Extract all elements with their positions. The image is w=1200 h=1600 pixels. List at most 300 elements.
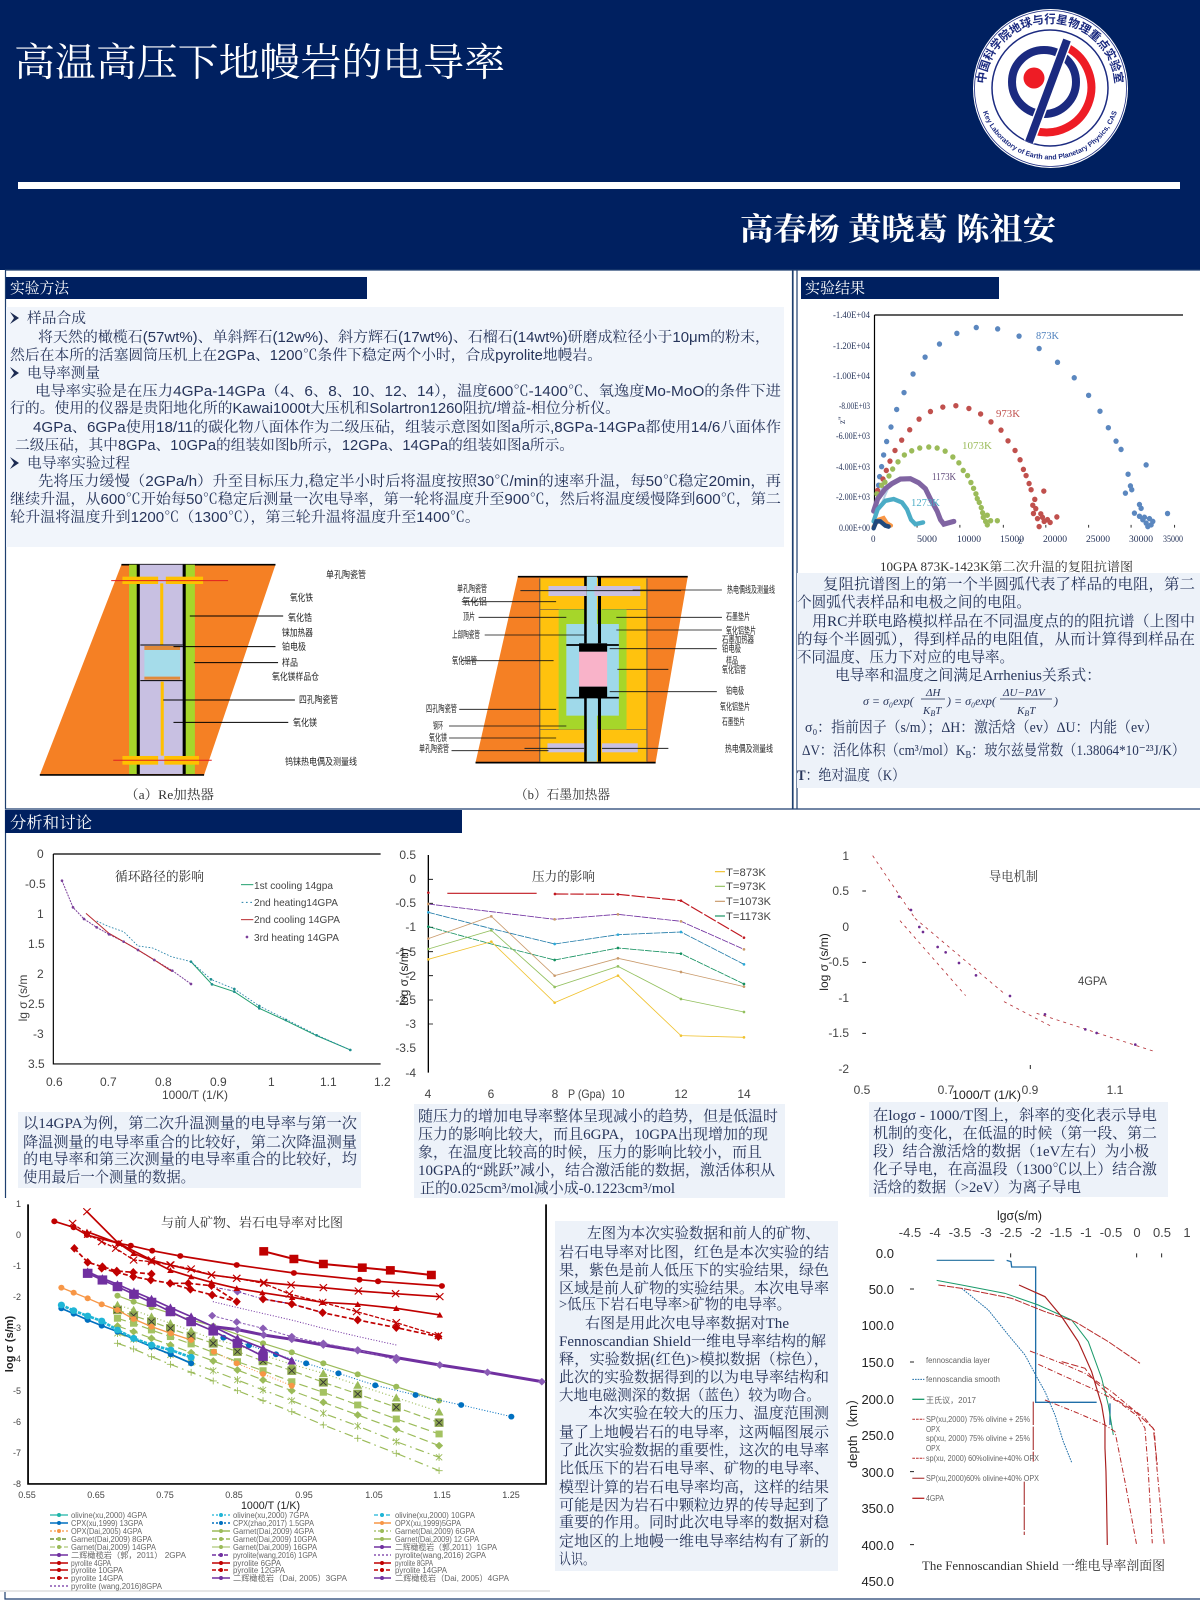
text: thermal cycle note: 使用最后一个测量的数据。 [23,1168,195,1186]
chart 3 labels: 1000/T (1/K) [952,1088,1021,1102]
results text block: 个圆弧代表样品和电极之间的电阻。 [797,593,1031,611]
chart 4 legend: Garnet(Dai,2009) 6GPA [395,1527,476,1536]
labels: graphite heater: 氧化铝垫片 [720,701,750,713]
chart axis labels: 0.00E+00 [839,523,870,533]
chart 1 labels: 1.5 [28,937,45,951]
chart 1 labels: 1.1 [320,1075,337,1089]
labels: Re heater: 氧化镁 [293,717,317,729]
chart 1 labels: 1 [268,1075,275,1089]
chart caption: 10GPA 873K-1423K第二次升温的复阻抗谱图 [880,559,1133,574]
chart 4 legend: 二辉橄榄岩（Dai, 2005）3GPA [233,1573,348,1583]
labels: graphite heater: 石墨加热器 [722,634,754,646]
chart 4 legend: OPX(xu,1999)5GPA [395,1519,462,1528]
formula: Arrhenius: T [1029,705,1036,717]
chart 2 labels: -2.5 [395,993,416,1007]
text: pressure effect note: 正的0.025cm³/mol减小成-0.1223cm³/mol [420,1180,675,1197]
labels: graphite heater: 单孔陶瓷管 [457,583,487,595]
chart 4 labels: -2 [13,1292,21,1302]
chart 4 labels: -4 [13,1354,21,1364]
labels: graphite heater: 上部陶瓷管 [452,629,480,641]
results text block [797,573,1200,788]
chart: pressure effect [395,848,772,1101]
text: summary discussion: 区域是前人矿物的实验结果。本次电导率 [559,1279,829,1297]
chart 4 labels: -7 [13,1448,21,1458]
chart 3 labels: -1.5 [828,1026,849,1040]
labels: Re heater: 四孔陶瓷管 [299,694,338,706]
chart 3 labels: -1 [838,991,849,1005]
text: conduction mechanism note: 机制的变化，在低温的时候（第一段、第二 [873,1125,1157,1142]
chart 2 labels: T=873K [726,867,767,879]
chart 4 labels: 0.85 [225,1490,243,1500]
logo: Key Laboratory of Earth and Planetary Physics: Key Laboratory of Earth and Planetary Physics, CAS [983,110,1116,160]
chart 3 labels: 0.5 [854,1083,871,1097]
chart 4 legend: pyrolite(wang,2016) 1GPA [233,1551,318,1560]
chart 1 labels: 0.9 [210,1075,227,1089]
diagram: Re heater assembly [40,565,366,775]
formula: Arrhenius: B [1024,709,1029,718]
formula: Arrhenius: σ = σ₀exp( [863,694,915,708]
chart 4 labels: -6 [13,1417,21,1427]
chart 2 labels: T=973K [726,881,767,893]
formula: Arrhenius [863,687,1058,718]
methods text block: 轮升温将温度升到1200℃（1300℃），第三轮升温将温度升至1400℃。 [10,508,480,526]
chart: conduction mechanism [817,849,1155,1102]
labels: graphite heater: 氧化镁 [429,732,447,744]
chart 2 labels [395,848,772,1101]
chart 5 legend: SP(xu,2000)60% olivine+40% OPX [926,1474,1040,1483]
chart 5 legend: fennoscandia layer [926,1356,990,1365]
results text block: T：绝对温度（K） [797,766,905,784]
formula: Arrhenius: K [1017,705,1024,717]
chart 4 legend: pyrolite 10GPA [71,1566,124,1575]
analysis heading: 分析和讨论 [10,814,92,832]
labels: Re heater [272,569,366,768]
chart 4 labels: 1.25 [502,1490,520,1500]
text: conduction mechanism note: 化子导电，在高温段（1300℃以上）结合激 [873,1160,1157,1178]
results text block: 不同温度、压力下对应的电导率。 [797,648,1014,666]
chart 3 labels: log σ (s/m) [817,933,831,991]
labels: graphite heater: 铂电极 [722,643,741,655]
chart 5 labels: -3 [980,1225,992,1240]
chart 4 labels: 0.55 [18,1490,36,1500]
formula: Arrhenius: ) [1053,694,1058,708]
chart 5 labels: 1 [1183,1225,1191,1240]
text: summary discussion: 量了上地幔岩石的电导率，这两幅图展示 [559,1423,830,1441]
chart 2 labels: log σ (s/m) [397,948,411,1006]
methods text block: 电导率实验是在压力4GPa-14GPa（4、6、8、10、12、14），温度600℃-1400℃、氧逸度Mo-MoO的条件下进 [35,382,782,400]
logo: Key Laboratory of Earth and Planetary Physics [973,9,1128,168]
chart axis labels: z" [837,416,847,424]
chart 4 labels: 1.05 [365,1490,383,1500]
chart 2 labels: 压力的影响 [532,866,595,885]
chart 3 labels: 1.1 [1107,1083,1124,1097]
chart 2 labels: P (Gpa) [568,1087,605,1101]
chart 5 legend: 王氏议，2017 [926,1396,977,1405]
text: pressure effect note: 象，在温度比较高的时候，压力的影响比较小，而且 [418,1143,762,1161]
chart: comparison with earlier studies [0,1198,550,1591]
chart 1 labels: 3.5 [28,1057,45,1071]
chart 4 legend: CPX(xu,1999) 13GPA [71,1519,144,1528]
chart 5 labels: depth（km） [845,1392,860,1468]
text: summary discussion: 右图是用此次电导率数据对The [585,1314,789,1332]
formula: Arrhenius: B [930,709,935,718]
text: summary discussion: 可能是因为岩石中颗粒边界的传导起到了 [559,1497,829,1514]
results text block: 电导率和温度之间满足Arrhenius关系式： [835,666,1101,684]
results text block: 的每个半圆弧），得到样品的电阻值，从而计算得到样品在 [797,630,1195,648]
chart 4 legend: olivine(xu,2000) 4GPA [71,1511,148,1520]
chart 4 labels: log σ (s/m) [4,1315,16,1372]
chart axis labels: 25000 [1086,534,1111,544]
chart 5 legend: sp(xu, 2000) 75% olivine + 25% [926,1434,1030,1443]
text: summary discussion: 认识。 [559,1551,595,1568]
chart 4 labels: 1.15 [433,1490,451,1500]
chart 4 legend: Garnet(Dai,2009) 8GPA [71,1535,153,1544]
temperature labels: 1073K [962,441,993,452]
labels: graphite heater: 钢环 [433,720,443,732]
chart 1 labels [16,847,391,1102]
chart 1 labels: 1st cooling 14gpa [254,880,333,892]
chart 4 legend: OPX(Dai,2005) 4GPA [71,1527,143,1536]
logo: Key Laboratory of Earth and Planetary Physics: 中国科学院地球与行星物理重点实验室 [976,13,1124,84]
chart 4 labels: 与前人矿物、岩石电导率对比图 [161,1212,343,1231]
chart 1 labels: 2 [37,967,44,981]
chart axis labels: -1.40E+04 [833,310,870,320]
temperature labels: 1173K [932,472,957,483]
chart 4 legend: olivine(xu,2000) 7GPA [233,1511,310,1520]
chart 2 labels: 0.5 [399,848,416,862]
chart 1 labels: 2nd heating14GPA [254,897,338,909]
methods text block: 电导率测量 [27,364,100,382]
chart axis labels: -2.00E+03 [836,492,870,502]
chart 3 labels: 1 [842,849,849,863]
text: summary discussion [555,1221,838,1571]
chart 3 labels: -2 [838,1062,849,1076]
chart 5 labels: 100.0 [861,1318,894,1333]
chart 4 legend: pyrolite 4GPA [71,1559,112,1568]
text: summary discussion: 果，紫色是前人低压下的实验结果，绿色 [559,1261,829,1279]
results text block: 用RC并联电路模拟样品在不同温度点的的阻抗谱（上图中 [812,612,1195,630]
text: pressure effect note [414,1104,785,1198]
methods text block: 4GPa、6GPa使用18/11的碳化物八面体作为二级压砧，组装示意图如图a所示,8GPa-14GPa都使用14/6八面体作 [33,418,781,436]
header divider bar [18,182,1180,189]
chart 3 labels [817,849,1124,1102]
chart 5 labels: 50.0 [869,1282,894,1297]
text: summary discussion: 此次的实验数据得到的以为电导率结构和 [559,1368,829,1386]
chart 4 legend [50,1511,510,1591]
labels: graphite heater: 氧化铝 [462,596,487,608]
authors: 高春杨 黄晓葛 陈祖安 [740,212,1058,247]
chart axis labels: z' [1018,536,1024,546]
chart 3 labels: 4GPA [1078,974,1107,988]
chart 3 labels: 导电机制 [989,866,1038,885]
methods text block: 电导率实验过程 [27,454,131,472]
results heading: 实验结果 [805,280,865,297]
chart 4 legend: pyrolite (wang,2016)8GPA [71,1582,163,1591]
formula: Arrhenius: ΔU−PΔV [1002,687,1046,699]
chart 2 labels: -0.5 [395,896,416,910]
text: summary discussion: 本次实验在较大的压力、温度范围测 [588,1404,829,1422]
chart 5 labels: -1.5 [1050,1225,1072,1240]
temperature labels: 973K [996,409,1021,420]
chart 2 labels: -2 [405,969,416,983]
text: conduction mechanism note [869,1102,1168,1197]
text: thermal cycle note: 的电导率和第三次测量的电导率重合的比较好，均 [23,1150,357,1168]
chart 5 labels: lgσ(s/m) [997,1208,1042,1223]
temperature labels: 1273K [911,498,941,509]
panel: methods [6,270,792,809]
chart 1 labels: 循环路径的影响 [115,866,204,885]
chart 2 labels: T=1173K [726,911,772,923]
chart 5 labels [845,1208,1191,1589]
chart 2 labels: -3 [405,1017,416,1031]
chart 4 legend: pyrolite 6GPA [233,1559,282,1568]
results text block: 复阻抗谱图上的第一个半圆弧代表了样品的电阻，第二 [823,575,1195,593]
labels: graphite heater: 石墨垫片 [722,716,745,728]
chart 1 labels: -0.5 [25,877,46,891]
chart 1 labels: 0.7 [100,1075,117,1089]
chart 4 legend: pyrolite 14GPA [71,1574,124,1583]
formula: Arrhenius: T [935,705,942,717]
chart 4 labels: -3 [13,1323,21,1333]
chart 5 legend: 4GPA [926,1494,945,1503]
methods text block: 然后在本所的活塞圆筒压机上在2GPa、1200℃条件下稳定两个小时，合成pyrolite地幔岩。 [10,347,602,364]
text: summary discussion: 释，实验数据(红色)>模拟数据（棕色）， [559,1350,829,1368]
chart 5 legend [926,1356,1040,1503]
chart axis labels [833,310,1183,546]
chart 1 labels: -3 [33,1027,44,1041]
chart 5 labels: 0.5 [1153,1225,1171,1240]
methods text block: 样品合成 [27,310,86,327]
chart: thermal cycle path effect [16,847,391,1102]
labels: Re heater: 氧化铁 [290,592,313,604]
results heading [801,277,999,299]
chart axis labels: -1.20E+04 [833,341,870,351]
chart 5 legend: OPX [926,1444,941,1453]
chart 4 labels: -8 [13,1479,21,1489]
chart 4 labels: -1 [13,1261,21,1271]
chart axis labels: -8.00E+03 [839,401,870,411]
chart 4 legend: 二辉橄榄岩（郭,2011）1GPA [395,1542,498,1552]
chart 5 labels: -4 [929,1225,941,1240]
methods heading [6,277,367,299]
chart 1 labels: 2.5 [28,997,45,1011]
labels: Re heater: 单孔陶瓷管 [326,569,366,581]
labels: graphite heater [419,583,775,755]
labels: graphite heater: 样品 [726,655,738,667]
chart 4 legend: Garnet(Dai,2009) 16GPA [233,1543,318,1552]
chart 1 labels: 0 [37,847,44,861]
chart 4 labels: 0.65 [87,1490,105,1500]
chart: complex impedance spectra [833,310,1183,546]
labels: graphite heater: 氧化铝垫片 [726,625,756,637]
chart 5 labels: 150.0 [861,1355,894,1370]
labels: graphite heater: 氧化铝管 [452,655,477,667]
chart axis labels: -6.00E+03 [836,431,870,441]
chart axis labels: 30000 [1129,534,1154,544]
chart 2 labels: -1 [405,920,416,934]
results text block: B [965,750,972,761]
text: summary discussion: 了此次实验数据的重要性，这次的电导率 [559,1441,829,1459]
chart 2 labels: 12 [674,1087,688,1101]
labels: graphite heater: 石墨垫片 [726,611,750,623]
chart 1 labels: 1 [37,907,44,921]
text: conduction mechanism note: 段）结合激活焓的数据（1eV左右）为小极 [873,1142,1149,1160]
chart 4 labels: 0.95 [295,1490,313,1500]
chart 5 labels: -0.5 [1100,1225,1122,1240]
chart 2 labels: 8 [552,1087,559,1101]
methods text block: 继续升温，从600℃开始每50℃稳定后测量一次电导率，第一轮将温度升至900℃，然后将温度缓慢降到600℃，第二 [10,490,781,508]
chart 5 labels: The Fennoscandian Shield 一维电导率剖面图 [922,1558,1165,1573]
methods text block [6,307,784,547]
text: conduction mechanism note: 在logσ - 1000/T图上，斜率的变化表示导电 [873,1106,1157,1124]
chart 2 labels: -1.5 [395,945,416,959]
labels: Re heater: 钨铼热电偶及测量线 [285,756,357,768]
text: summary discussion: 定地区的上地幔一维电导率结构有了新的 [559,1532,829,1550]
chart axis labels: 20000 [1043,534,1068,544]
chart 2 labels: 0 [409,872,416,886]
text: summary discussion: >低压下岩石电导率>矿物的电导率。 [559,1295,791,1313]
formula: Arrhenius: ΔH [925,687,941,699]
header banner [0,0,1200,270]
text: summary discussion: 大地电磁测深的数据（蓝色）较为吻合。 [559,1386,821,1404]
text: summary discussion: 模型计算的岩石电导率均高，这样的结果 [559,1478,829,1496]
chart 1 labels: lg σ (s/m [16,975,30,1021]
chart 4 legend: pyrolite(wang,2016) 2GPA [395,1551,487,1560]
chart 4 legend: Garnet(Dai,2009) 10GPA [233,1535,318,1544]
chart 1 labels: 3rd heating 14GPA [254,932,339,944]
text: summary discussion: 岩石电导率对比图，红色是本次实验的结 [559,1243,829,1261]
chart axis labels: 5000 [917,534,938,544]
title: 高温高压下地幔岩的电导率 [14,42,505,85]
text: summary discussion: 重要的作用。同时此次电导率的数据对稳 [559,1513,830,1531]
chart 2 labels: 4 [425,1087,432,1101]
chart 5 labels: -1 [1080,1225,1092,1240]
chart 3 labels: 0.5 [832,884,849,898]
chart 2 labels: -3.5 [395,1041,416,1055]
text: pressure effect note: 随压力的增加电导率整体呈现减小的趋势，但是低温时 [418,1107,778,1125]
labels: graphite heater: 热电偶及测量线 [725,743,773,755]
chart 4 legend: pyrolite 14GPA [395,1566,448,1575]
labels: graphite heater: 热电偶线及测量线 [727,584,775,596]
results text block: ΔV：活化体积（cm³/mol）K [802,743,989,759]
panel: results [793,270,1200,809]
labels: Re heater: 铼加热器 [282,627,313,639]
chart 1 labels: 0.6 [46,1075,63,1089]
chart 1 labels: 2nd cooling 14GPA [254,914,340,926]
chart 4 labels [4,1199,520,1512]
methods text block: 将天然的橄榄石(57wt%)、单斜辉石(12w%)、斜方辉石(17wt%)、石榴石(14wt%)研磨成粒径小于10μm的粉末， [38,328,770,346]
methods text block: 行的。使用的仪器是贵阳地化所的Kawai1000t大压机和Solartron1260阻抗/增益-相位分析仪。 [10,399,620,417]
text: summary discussion: 左图为本次实验数据和前人的矿物、 [587,1224,820,1242]
chart 1 labels: 0.8 [155,1075,172,1089]
labels: graphite heater: 单孔陶瓷管 [419,743,449,755]
chart 3 labels: -0.5 [828,955,849,969]
chart 4 legend: pyrolite 12GPA [233,1566,286,1575]
text: pressure effect note: 压力的影响比较大，而且6GPA，10GPA出现增加的现 [418,1126,768,1143]
methods text block: 二级压砧，其中8GPa、10GPa的组装如图b所示，12GPa、14GPa的组装如图a所示。 [15,437,574,454]
chart 5 legend: sp(xu, 2000) 60%olivine+40% OPX [926,1454,1040,1463]
chart: Fennoscandian Shield 1D conductivity profile [845,1208,1191,1589]
chart 2 labels: T=1073K [726,896,772,908]
chart 4 labels: 1000/T (1/K) [241,1500,300,1512]
chart axis labels: 10000 [957,534,982,544]
text: conduction mechanism note: 活焓的数据（>2eV）为离子导电 [873,1178,1081,1196]
analysis heading [5,810,462,833]
text: pressure effect note: 10GPA的“跳跃”减小，结合激活能的数据，激活体积从 [418,1161,775,1179]
caption: graphite heater: （b）石墨加热器 [515,787,610,802]
chart 2 labels: 6 [488,1087,495,1101]
chart 1 labels: 1000/T (1/K) [162,1088,228,1102]
text: summary discussion: Fennoscandian Shield一维电导率结构的解 [559,1332,826,1350]
labels: Re heater: 铂电极 [282,641,306,653]
chart 2 labels: -4 [405,1066,416,1080]
chart 4 legend: 二辉橄榄岩（郭，2011） 2GPA [71,1550,187,1560]
chart 4 legend: pyrolite 8GPA [395,1559,434,1568]
diagram: graphite heater assembly [419,577,775,763]
chart 4 labels: 0.75 [156,1490,174,1500]
chart axis labels: 35000 [1163,534,1183,544]
chart 4 legend: 二辉橄榄岩（Dai, 2005）4GPA [395,1573,510,1583]
chart 5 labels: 200.0 [861,1392,894,1407]
chart 3 labels: 0.7 [938,1083,955,1097]
labels: graphite heater: 四孔陶瓷管 [426,703,457,715]
chart 1 labels: 1.2 [374,1075,391,1089]
methods heading: 实验方法 [10,280,70,297]
chart 5 labels: 350.0 [861,1501,894,1516]
labels: graphite heater: 铂电极 [726,685,744,697]
labels: Re heater: 氧化镁样品仓 [272,671,319,683]
temperature labels: 873K [1036,331,1060,342]
chart 5 labels: 250.0 [861,1428,894,1443]
caption: Re heater: （a）Re加热器 [125,787,214,802]
labels: graphite heater: 顶片 [463,611,475,623]
chart 4 legend: Garnet(Dai,2009) 12 GPA [395,1535,480,1544]
labels: Re heater: 样品 [282,657,298,669]
chart 4 labels: 1 [16,1199,21,1209]
chart 5 labels: 0 [1133,1225,1141,1240]
labels: Re heater: 氧化锆 [288,612,312,624]
panel: analysis and discussion [0,810,1200,1599]
labels: graphite heater: 氧化铝管 [722,664,746,676]
chart 2 labels: 10 [611,1087,625,1101]
chart 5 legend: SP(xu,2000) 75% olivine + 25% [926,1415,1030,1424]
chart 5 legend: OPX [926,1425,941,1434]
chart 5 labels: 300.0 [861,1465,894,1480]
chart axis labels: 0 [871,534,876,544]
text: thermal cycle note: 降温测量的电导率重合的比较好，第二次降温测量 [23,1133,357,1151]
chart axis labels: 15000 [1000,534,1025,544]
chart 4 labels: 0 [16,1230,21,1240]
text: thermal cycle note: 以14GPA为例，第二次升温测量的电导率与第一次 [23,1114,357,1132]
chart axis labels: -1.00E+04 [833,371,870,381]
results text block: σ₀：指前因子（s/m）；ΔH：激活焓（ev）ΔU：内能（ev） [805,719,1158,736]
text: thermal cycle note [18,1112,361,1188]
chart 5 labels: -4.5 [899,1225,921,1240]
methods text block: 先将压力缓慢（2GPa/h）升至目标压力,稳定半小时后将温度按照30℃/min的速率升温，每50℃稳定20min，再 [38,472,782,490]
chart 3 labels: 0.9 [1022,1083,1039,1097]
temperature labels [911,331,1060,509]
chart 5 legend: fennoscandia smooth [926,1375,1000,1384]
chart 5 labels: -2.5 [1000,1225,1022,1240]
chart 5 labels: -2 [1030,1225,1042,1240]
chart 4 legend: olivine(xu,2000) 10GPA [395,1511,476,1520]
chart 4 legend: Garnet(Dai,2009) 14GPA [71,1543,157,1552]
chart 4 legend: Garnet(Dai,2009) 4GPA [233,1527,315,1536]
formula: Arrhenius: K [923,705,930,717]
chart 4 labels: -5 [13,1386,21,1396]
chart 5 labels: 450.0 [861,1574,894,1589]
chart 5 labels: -3.5 [949,1225,971,1240]
